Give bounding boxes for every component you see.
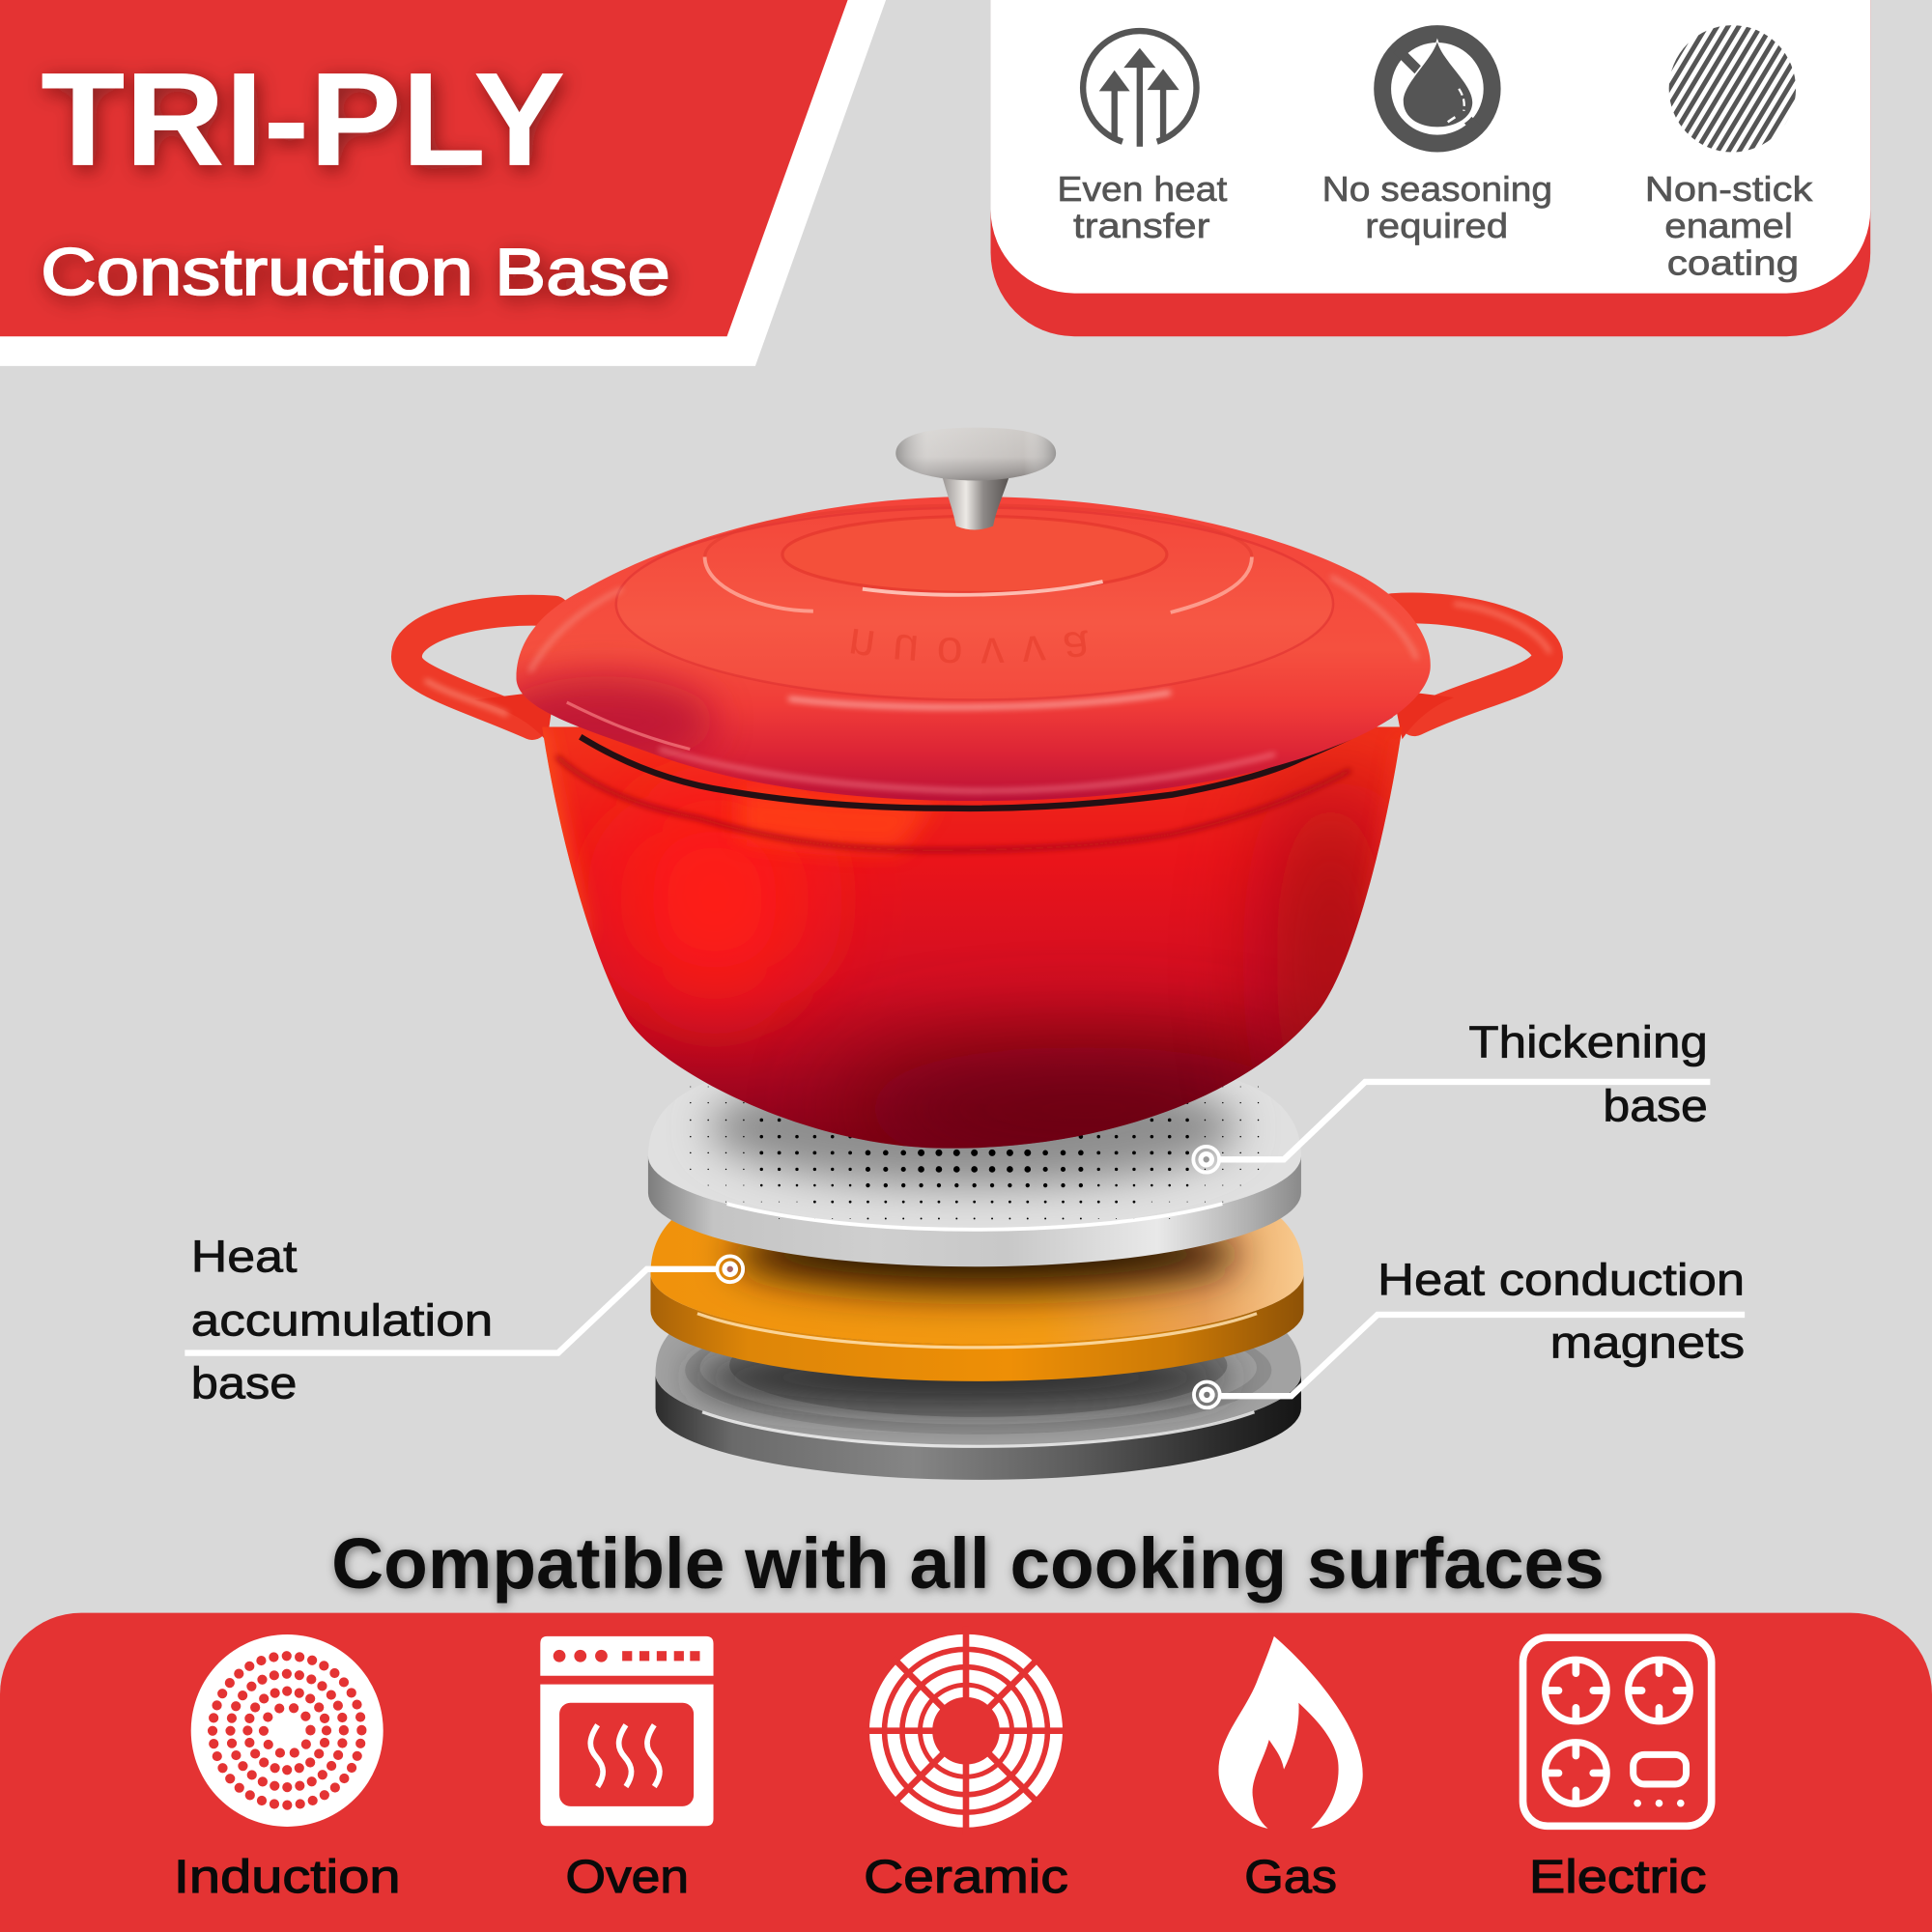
callout: Heat accumulation base (185, 1231, 743, 1408)
label: Even heat transfer: Even heat (1057, 170, 1227, 209)
title: TRI-PLY: TRI-PLY (41, 45, 565, 194)
subtitle: Construction Base: Construction Base (41, 235, 670, 309)
callout: Heat accumulation base: Heat (191, 1231, 298, 1281)
label: Electric: Electric (1529, 1851, 1707, 1903)
label: Even heat transfer: transfer (1073, 207, 1210, 245)
embossed logo: nuovva (850, 629, 1088, 663)
label: Gas: Gas (1244, 1851, 1337, 1903)
icon: electric hob (1523, 1637, 1712, 1826)
icon: oven (540, 1636, 714, 1826)
lid gasket (581, 715, 1391, 809)
knob (895, 428, 1056, 529)
layer: thickening base disc (648, 1068, 1301, 1266)
callout: Heat conduction magnets: Heat conduction (1378, 1255, 1745, 1305)
layer: heat conduction magnets disc (656, 1306, 1301, 1480)
callout: Thickening base: base (1603, 1081, 1708, 1131)
label: No seasoning required: No seasoning (1322, 170, 1552, 209)
left handle (407, 611, 554, 742)
label: No seasoning required: required (1365, 207, 1508, 245)
label: No seasoning required (1322, 170, 1552, 245)
right handle (1392, 604, 1550, 739)
callout: Thickening base (1193, 1016, 1710, 1173)
dot pattern (691, 1087, 1259, 1218)
title banner (0, 0, 886, 366)
icon: even heat transfer (1083, 31, 1197, 147)
callout: Heat conduction magnets (1194, 1255, 1745, 1407)
callout: Thickening base: Thickening (1468, 1016, 1708, 1066)
label: Even heat transfer (1057, 170, 1227, 245)
label: Ceramic: Ceramic (864, 1851, 1068, 1903)
icon: no seasoning (1382, 34, 1492, 144)
label: Non-stick enamel coating (1645, 170, 1812, 282)
panel: cooking surfaces (0, 1613, 1932, 1932)
lid (493, 493, 1435, 807)
callout: Heat conduction magnets: magnets (1550, 1318, 1745, 1368)
layer: heat accumulation disc (650, 1208, 1303, 1381)
panel: features (991, 0, 1870, 336)
callout: Heat accumulation base: base (191, 1358, 297, 1408)
label: Non-stick enamel coating: enamel (1664, 207, 1793, 245)
label: Induction: Induction (174, 1851, 401, 1903)
heading: compatible: Compatible with all cooking surfaces (331, 1523, 1605, 1604)
label: Oven: Oven (565, 1851, 689, 1903)
icon: ceramic (863, 1627, 1069, 1836)
icon: non-stick stripes (1652, 41, 1812, 137)
dutch oven pot (391, 428, 1563, 1149)
label: Non-stick enamel coating: coating (1667, 243, 1799, 282)
label: Non-stick enamel coating: Non-stick (1645, 170, 1812, 209)
icon: induction (191, 1634, 384, 1827)
callout: Heat accumulation base: accumulation (191, 1295, 493, 1346)
pot body (543, 726, 1401, 1149)
icon: gas flame (1218, 1636, 1363, 1829)
